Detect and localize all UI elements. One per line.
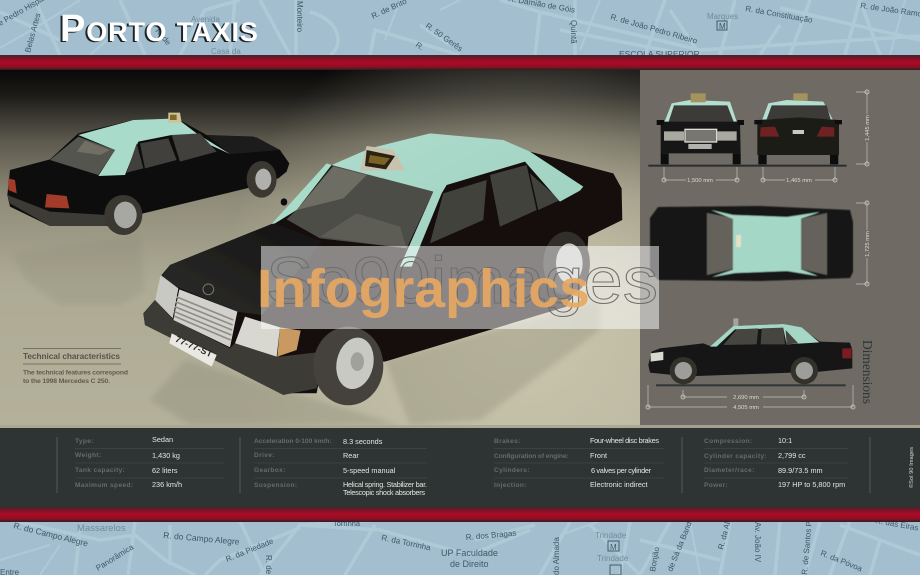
callout: technical characteristics: The technical features correspond <box>23 370 128 376</box>
table column: performance: Helical spring. Stabilizer bar. <box>343 480 427 489</box>
blueprint: rear view <box>754 93 842 164</box>
table column: brakes and engine layout: Electronic indirect <box>590 480 648 489</box>
table column: general: Maximum speed: <box>75 482 133 489</box>
car: rear three-quarter view <box>7 113 289 235</box>
table column: brakes and engine layout: Injection: <box>494 482 527 489</box>
table column: performance <box>240 437 427 497</box>
turn signal <box>277 327 301 357</box>
map: top street background: Casa da <box>211 47 241 56</box>
dimension: front track: 1,500 mm <box>687 178 713 184</box>
table column: engine figures <box>682 436 848 493</box>
dimension: length: 4,505 mm <box>733 405 759 411</box>
table column: general: 62 liters <box>152 466 178 475</box>
headlight: right <box>235 317 280 357</box>
headlight: left <box>155 275 178 318</box>
windshield <box>287 165 433 248</box>
map: bottom street background: Av. João IV <box>753 522 762 563</box>
table column: brakes and engine layout: Cylinders: <box>494 467 530 474</box>
table column: performance: Rear <box>343 451 359 460</box>
blueprint: side view <box>648 318 852 386</box>
dimension: width: 1,725 mm <box>865 231 871 257</box>
map: top street background: R. de João Pedro Ribeiro <box>609 12 699 46</box>
emblem <box>203 284 214 295</box>
table column: brakes and engine layout: Four-wheel disc brakes <box>590 436 659 445</box>
map: bottom street background: Massarelos <box>77 523 126 534</box>
reflection: main car <box>150 300 600 425</box>
map: bottom street background: Trindade <box>597 554 629 563</box>
title: Porto taxis <box>60 8 259 50</box>
table column: general: 1,430 kg <box>152 451 180 460</box>
table column: engine figures: Diameter/race: <box>704 467 755 474</box>
wheel: front <box>313 327 383 405</box>
taillights <box>8 178 69 208</box>
map: top street background: ESCOLA SUPERIOR <box>619 49 700 59</box>
reflection: rear car <box>13 234 145 305</box>
map: bottom street background: R. da Torrinha <box>381 533 432 552</box>
table column: general <box>57 435 224 493</box>
table column: engine figures: Cylinder capacity: <box>704 453 767 460</box>
map: bottom street background: R. da Piedade <box>224 536 275 564</box>
map: bottom street background: M <box>610 543 617 552</box>
table column: engine figures: Power: <box>704 482 728 489</box>
map: bottom street background: R. da Póvoa <box>819 549 864 574</box>
map: top street background: Belas Artes <box>23 12 42 54</box>
license plate <box>169 333 217 367</box>
map: bottom street background: R. das Eiras <box>875 516 919 533</box>
map: bottom street background: R. do Campo Alegre <box>163 530 240 547</box>
windows: side and rear <box>50 137 115 175</box>
map: bottom street background: Panorâmica <box>94 542 136 573</box>
map: bottom street background: R. de <box>264 555 273 575</box>
callout: technical characteristics: Technical characteristics <box>23 351 120 361</box>
map: top street background: R. 50 Gerês <box>424 21 464 53</box>
table column: performance: Drive: <box>254 452 275 459</box>
map: top street background: Monteiro <box>295 1 304 33</box>
table column: brakes and engine layout: Brakes: <box>494 438 521 445</box>
table column: general: Sedan <box>152 435 173 444</box>
map: bottom street background: R. dos Bragas <box>465 529 517 542</box>
table column: performance: Telescopic shock absorbers <box>343 488 425 497</box>
wheel: front <box>247 161 277 198</box>
car: main three-quarter view <box>143 133 622 405</box>
map: bottom street background: UP Faculdade <box>441 548 498 558</box>
red band: top <box>0 55 920 70</box>
table column: performance: Suspension: <box>254 482 297 489</box>
license plate: 77-77-ST <box>174 334 214 359</box>
dimension: length <box>646 385 855 411</box>
dimension: wheelbase: 2,690 mm <box>733 395 759 401</box>
bumper <box>143 300 323 395</box>
table column: engine figures: 2,799 cc <box>778 451 806 460</box>
dimension: height: 1,445 mm <box>865 115 871 141</box>
table column: general: Type: <box>75 438 94 445</box>
side windows <box>430 165 560 243</box>
taxi sign <box>360 146 405 171</box>
map: top street background: R. <box>414 40 426 52</box>
map: bottom street background: de Sá da Bandeira <box>666 507 699 573</box>
divider and copyright: ©Sol 90 Images <box>908 447 915 488</box>
map: bottom street background: do Almada <box>552 537 561 575</box>
map: bottom street background: Torrinha <box>333 519 361 528</box>
dimension: front track <box>662 167 739 184</box>
map: top street background: R. de <box>153 27 173 47</box>
table column: engine figures: 10:1 <box>778 436 792 445</box>
callout: technical characteristics <box>23 348 128 385</box>
table column: brakes and engine layout: 6 valves per cylinder <box>591 466 652 475</box>
heading: dimensions: Dimensions <box>860 340 875 404</box>
panel: main image floor <box>0 70 640 428</box>
table column: engine figures: Compression: <box>704 438 753 445</box>
blueprint: top view <box>650 206 853 281</box>
watermark: Infographics <box>257 259 590 319</box>
map: top street background: R. da Constituação <box>745 4 814 25</box>
table column: performance: Acceleration 0-100 km/h: <box>254 438 332 445</box>
watermark: So90images <box>266 243 658 317</box>
roof: mint <box>78 118 230 176</box>
map: bottom street background: Bonjão <box>648 546 661 572</box>
divider and copyright <box>870 437 915 493</box>
map: top street background: Avenida <box>191 15 220 24</box>
table column: brakes and engine layout <box>494 436 664 489</box>
map: bottom street background: R. de Santos Pousada <box>800 494 816 575</box>
map: bottom street background: Trindade <box>595 531 627 540</box>
dimension: height <box>856 90 871 166</box>
blueprint: front view <box>648 93 847 167</box>
wheel: rear <box>543 232 590 295</box>
dimension: rear track: 1,465 mm <box>786 178 812 184</box>
dimension: wheelbase <box>681 390 806 401</box>
map: top street background <box>0 0 920 59</box>
roof: mint <box>332 133 583 267</box>
table column: general: Tank capacity: <box>75 467 125 474</box>
callout: technical characteristics: to the 1998 Mercedes C 250. <box>23 378 110 385</box>
map: bottom street background: de Direito <box>450 559 489 569</box>
wheel: rear <box>104 195 142 235</box>
map: top street background: Marques <box>707 12 738 21</box>
grille <box>173 289 237 347</box>
dimension: rear track <box>761 167 837 184</box>
table column: engine figures: 197 HP to 5,800 rpm <box>778 480 845 489</box>
map: top street background: M <box>719 22 726 31</box>
hood <box>162 223 322 315</box>
map: bottom street background: R. do Campo Alegre <box>13 520 89 549</box>
map: top street background: Quintã <box>569 20 578 44</box>
table column: general: Weight: <box>75 452 102 459</box>
pillar: left mint <box>272 163 332 224</box>
mirror <box>281 198 287 206</box>
table column: performance: 5-speed manual <box>343 466 396 475</box>
table column: brakes and engine layout: Front <box>590 451 607 460</box>
table column: performance: 8.3 seconds <box>343 437 383 446</box>
table column: performance: Gearbox: <box>254 467 286 474</box>
table column: brakes and engine layout: Configuration of engine: <box>494 453 569 460</box>
table column: engine figures: 89.9/73.5 mm <box>778 466 823 475</box>
red band: bottom <box>0 507 920 522</box>
map: bottom street background <box>0 494 920 575</box>
map: bottom street background: R. da Alegria <box>716 503 737 551</box>
panel: dimensions background <box>640 70 920 428</box>
taxi sign <box>168 113 182 123</box>
table column: general: 236 km/h <box>152 480 182 489</box>
panel: specifications background <box>0 425 920 507</box>
dimension: width <box>856 201 871 286</box>
